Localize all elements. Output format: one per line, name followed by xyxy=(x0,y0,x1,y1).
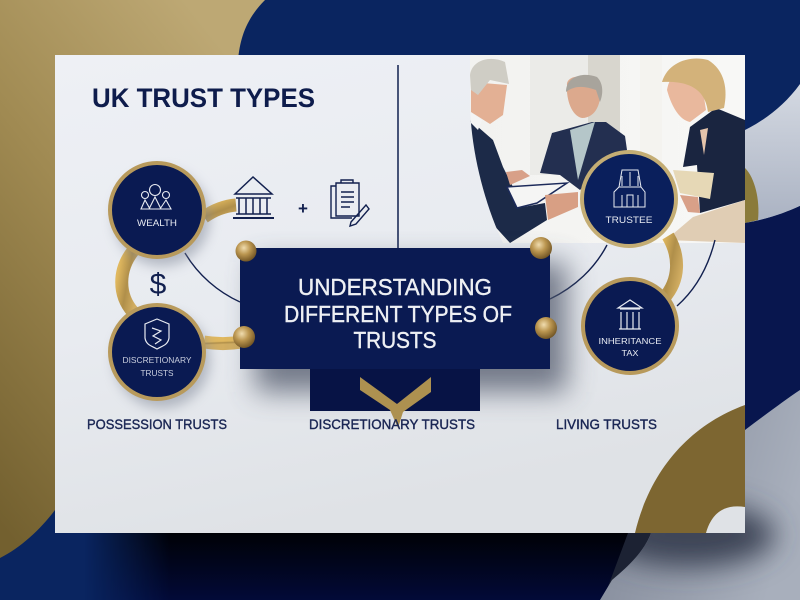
divider line xyxy=(397,65,399,248)
label: living trusts: LIVING TRUSTS xyxy=(556,416,657,432)
badge: trustee: TRUSTEE xyxy=(606,215,652,225)
lower navy tab xyxy=(310,369,480,411)
gold corner shape xyxy=(635,405,745,533)
centre banner shadow xyxy=(255,262,567,392)
background shape: dark under-card area xyxy=(93,533,628,600)
thin connector lines xyxy=(185,240,715,306)
gold chevron xyxy=(360,377,431,428)
person: left man xyxy=(470,59,578,243)
dollar sign: $ xyxy=(150,268,167,301)
background shape: deep navy right xyxy=(745,206,800,430)
badge: wealth xyxy=(110,163,210,266)
gold studs xyxy=(233,237,557,348)
cream cloth xyxy=(674,200,745,243)
badge: discretionary trusts xyxy=(110,305,210,408)
badge: trustee xyxy=(582,152,676,246)
badge: inheritance tax xyxy=(583,279,677,373)
title: UK TRUST TYPES xyxy=(92,83,315,113)
icon: temple xyxy=(618,300,642,329)
badge: inheritance tax: INHERITANCE xyxy=(598,336,662,346)
background shape: small gold right xyxy=(745,168,758,223)
badge: discretionary trusts: DISCRETIONARY xyxy=(122,355,192,365)
label: discretionary trusts: DISCRETIONARY TRUSTS xyxy=(309,416,475,432)
envelope xyxy=(673,170,714,199)
icon: shield xyxy=(145,319,169,349)
background shape: grey right xyxy=(745,84,800,223)
plus sign: + xyxy=(298,199,308,218)
person: centre man xyxy=(540,75,627,190)
centre banner: DIFFERENT TYPES OF xyxy=(284,301,512,327)
icon: people xyxy=(141,184,171,209)
centre banner xyxy=(240,248,550,369)
person: right woman xyxy=(662,58,745,213)
badge: discretionary trusts: TRUSTS xyxy=(140,368,174,378)
background shape: dark sliver xyxy=(606,533,652,592)
background shape: grey bottom-right xyxy=(590,380,800,600)
panel: main card xyxy=(55,55,745,533)
badge: wealth: WEALTH xyxy=(137,218,177,228)
icon: building xyxy=(614,170,645,207)
background shape: gold top-left xyxy=(0,0,265,558)
badge: inheritance tax: TAX xyxy=(622,348,639,358)
icon: document and pen xyxy=(331,180,369,226)
icon: bank xyxy=(233,177,274,218)
centre banner: TRUSTS xyxy=(354,327,436,353)
gold connector bands xyxy=(122,205,677,344)
card shadow on grey xyxy=(605,503,775,567)
label: possession trusts: POSSESSION TRUSTS xyxy=(87,416,227,432)
centre banner: UNDERSTANDING xyxy=(298,274,492,300)
photo: handshake meeting xyxy=(470,55,745,243)
